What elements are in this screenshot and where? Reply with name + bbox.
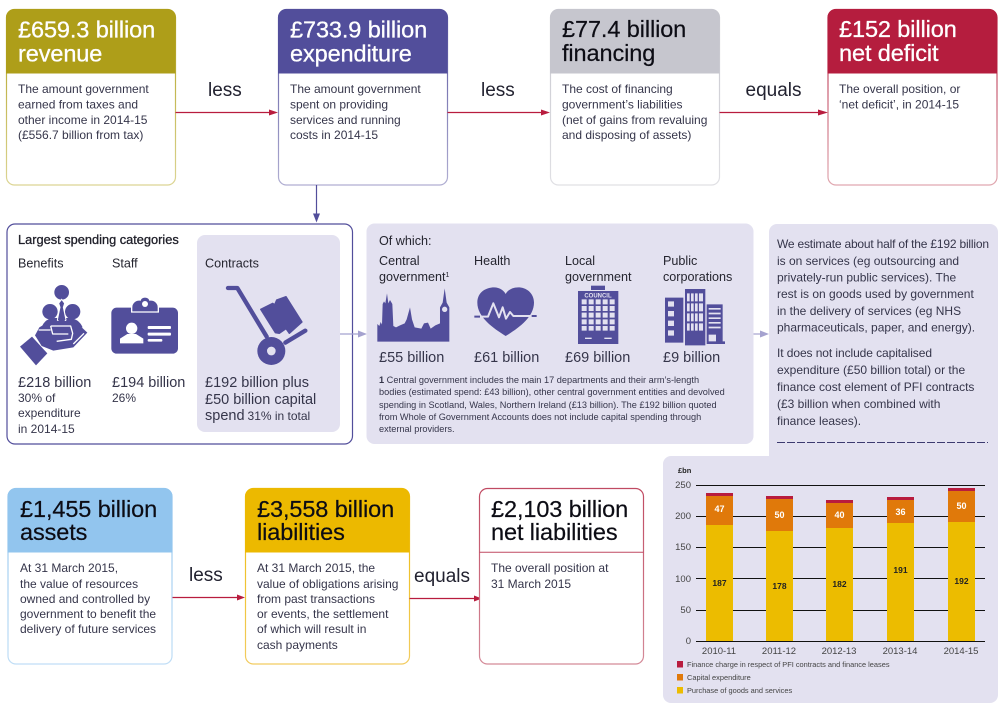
box: expenditure: spent on providing — [290, 98, 388, 112]
column: staff: Staff — [112, 256, 138, 270]
bar 2012-13: 2012-13 — [822, 646, 856, 657]
footnote: from Whole of Government Accounts does not include capital spending through — [379, 412, 701, 422]
column: public corporations: Public — [663, 254, 697, 268]
bar 2013-14: 191 — [893, 565, 908, 575]
box: net liabilities: 31 March 2015 — [491, 577, 571, 591]
text block: contracts explanation: We estimate about half of the £192 billion — [777, 237, 989, 251]
bar 2012-13: 40 — [834, 510, 845, 520]
box: revenue: other income in 2014-15 — [18, 113, 148, 127]
arrow: expenditure to spending categories — [313, 185, 320, 222]
callout: contracts: Contracts — [205, 256, 259, 270]
column: public corporations — [663, 254, 732, 366]
icon: council building: COUNCIL — [584, 294, 612, 300]
bar 2011-12: 2011-12 — [762, 646, 796, 657]
box: financing: £77.4 billion — [562, 16, 686, 42]
footnote: external providers. — [379, 424, 455, 434]
box: assets: £1,455 billion — [20, 496, 157, 522]
bar 2011-12: 178 — [772, 581, 787, 591]
callout: contracts: £50 billion capital — [205, 392, 316, 408]
box: assets: At 31 March 2015, — [20, 561, 118, 575]
box: revenue: earned from taxes and — [18, 98, 138, 112]
column: benefits: expenditure — [18, 406, 81, 420]
chart axis labels: 50 — [680, 605, 691, 616]
bar 2014-15 — [944, 488, 978, 657]
box: assets: government to benefit the — [20, 607, 156, 621]
label and arrow: less: less — [481, 80, 515, 101]
bar 2014-15: 2014-15 — [944, 646, 978, 657]
column: local government — [565, 254, 632, 366]
box: net deficit — [828, 10, 997, 185]
box: assets: assets — [20, 519, 87, 545]
text block: contracts explanation — [777, 237, 989, 428]
box: net liabilities: The overall position at — [491, 561, 609, 575]
box: revenue: The amount government — [18, 82, 149, 96]
box: net deficit: ‘net deficit’, in 2014-15 — [839, 98, 959, 112]
column: benefits: £218 billion — [18, 375, 91, 391]
chart axis labels: 100 — [675, 574, 691, 585]
box: financing: financing — [562, 40, 655, 66]
box: assets: the value of resources — [20, 577, 138, 591]
label and arrow: less: less — [208, 80, 242, 101]
chart legend: Purchase of goods and services — [687, 686, 792, 695]
column: central government: £55 billion — [379, 350, 444, 366]
footnote: bodies (estimated spend: £43 billion), other central government entities and devolved — [379, 387, 725, 397]
bar 2010-11: 47 — [714, 504, 725, 514]
icon: staff id badge — [111, 297, 178, 354]
box: financing: The cost of financing — [562, 82, 673, 96]
chart axis labels: 200 — [675, 511, 691, 522]
box: financing: and disposing of assets) — [562, 128, 691, 142]
column: benefits: 30% of — [18, 391, 56, 405]
chart axis labels: 0 — [686, 636, 691, 647]
column: staff: 26% — [112, 391, 136, 405]
box: liabilities: £3,558 billion — [257, 496, 394, 522]
icon: office buildings — [665, 289, 725, 345]
chart axis labels — [675, 480, 691, 647]
column: public corporations: £9 billion — [663, 350, 720, 366]
label and arrow: less — [176, 80, 278, 116]
arrow: categories to breakdown — [340, 330, 367, 338]
box: liabilities: of which will result in — [257, 622, 366, 636]
box: revenue: £659.3 billion — [18, 16, 155, 42]
box: liabilities — [245, 488, 410, 664]
column: central government — [377, 254, 450, 366]
column: health — [474, 254, 539, 366]
box: expenditure: services and running — [290, 113, 401, 127]
bar 2012-13 — [822, 500, 856, 657]
bar 2013-14: 2013-14 — [883, 646, 917, 657]
box: liabilities: At 31 March 2015, the — [257, 561, 375, 575]
text block: contracts explanation: pharmaceuticals, paper, and energy). — [777, 320, 975, 334]
column: benefits — [18, 256, 91, 436]
box: net liabilities — [480, 488, 644, 664]
column: central government: Central — [379, 254, 420, 268]
stacked bar chart: £bn — [678, 466, 692, 475]
column: benefits: Benefits — [18, 256, 64, 270]
column: staff — [111, 256, 185, 405]
box: expenditure: The amount government — [290, 82, 421, 96]
column: staff: £194 billion — [112, 375, 185, 391]
box: net liabilities: £2,103 billion — [491, 496, 628, 522]
panel: contracts explanation and chart background — [663, 224, 998, 703]
box: net deficit: £152 billion — [839, 16, 957, 42]
chart legend: Capital expenditure — [687, 673, 751, 682]
box: assets: delivery of future services — [20, 622, 156, 636]
bar 2014-15: 192 — [954, 576, 969, 586]
bar 2013-14: 36 — [895, 507, 906, 517]
text block: contracts explanation: It does not include capitalised — [777, 346, 932, 360]
box: liabilities: or events, the settlement — [257, 607, 389, 621]
panel heading: Largest spending categories — [18, 232, 179, 247]
text block: contracts explanation: rest is on goods used by government — [777, 287, 974, 301]
box: liabilities: from past transactions — [257, 592, 375, 606]
text block: contracts explanation: in the delivery of services (eg NHS — [777, 304, 961, 318]
bar 2010-11: 2010-11 — [702, 646, 736, 657]
column: local government: Local — [565, 254, 595, 268]
box: net deficit: net deficit — [839, 40, 939, 66]
box: revenue: (£556.7 billion from tax) — [18, 128, 143, 142]
box: assets — [8, 488, 172, 664]
column: local government: £69 billion — [565, 350, 630, 366]
callout: contracts — [197, 235, 340, 432]
label and arrow: equals: equals — [414, 566, 470, 587]
text block: contracts explanation: privately-run public services). The — [777, 270, 957, 284]
label and arrow: equals — [410, 566, 482, 602]
panel: of which breakdown: Of which: — [379, 234, 432, 248]
icon: heart with pulse — [474, 287, 537, 336]
bar 2014-15: 50 — [956, 501, 967, 511]
chart axis labels: 150 — [675, 542, 691, 553]
icon: hand holding people — [20, 285, 87, 365]
arrow: breakdown to contracts explanation — [754, 330, 769, 338]
footnote — [379, 375, 725, 434]
text block: contracts explanation: (£3 billion when combined with — [777, 397, 940, 411]
bar 2011-12 — [762, 496, 796, 657]
box: assets: owned and controlled by — [20, 592, 150, 606]
stacked bar chart — [675, 466, 985, 695]
bar 2010-11: 187 — [712, 578, 727, 588]
box: financing: government’s liabilities — [562, 98, 683, 112]
column: health: Health — [474, 254, 510, 268]
box: liabilities: cash payments — [257, 638, 338, 652]
column: central government: government — [379, 270, 446, 284]
box: net liabilities: net liabilities — [491, 519, 618, 545]
bar 2012-13: 182 — [832, 579, 847, 589]
text block: contracts explanation: expenditure (£50 billion total) or the — [777, 363, 965, 377]
callout: contracts: £192 billion plus — [205, 375, 309, 391]
box: expenditure — [278, 10, 448, 185]
footnote: 1 Central government includes the main 17 departments and their arm’s-length — [379, 375, 699, 385]
chart axis labels: 250 — [675, 480, 691, 491]
chart legend — [677, 660, 890, 695]
box: liabilities: value of obligations arising — [257, 577, 398, 591]
callout: contracts: spend31% in total — [205, 408, 310, 424]
column: local government: government — [565, 270, 632, 284]
column: public corporations: corporations — [663, 270, 732, 284]
label and arrow: equals: equals — [746, 80, 802, 101]
text block: contracts explanation: finance cost element of PFI contracts — [777, 380, 974, 394]
box: expenditure: costs in 2014-15 — [290, 128, 378, 142]
box: financing: (net of gains from revaluing — [562, 113, 707, 127]
footnote: spending in Scotland, Wales, Northern Ireland (£13 billion). The £192 billion quoted — [379, 400, 717, 410]
bar 2011-12: 50 — [774, 510, 785, 520]
panel: largest spending categories — [7, 224, 352, 444]
label and arrow: less — [172, 565, 245, 600]
box: revenue: revenue — [18, 40, 102, 66]
box: liabilities: liabilities — [257, 519, 345, 545]
panel: of which breakdown — [366, 224, 754, 444]
label and arrow: less: less — [189, 565, 223, 586]
box: expenditure: £733.9 billion — [290, 16, 427, 42]
text block: contracts explanation: finance leases). — [777, 414, 861, 428]
column: benefits: in 2014-15 — [18, 422, 75, 436]
icon: westminster skyline — [377, 288, 449, 342]
column: central government: 1 — [446, 272, 450, 279]
label and arrow: less — [448, 80, 550, 116]
bar 2010-11 — [702, 493, 736, 657]
chart legend: Finance charge in respect of PFI contracts and finance leases — [687, 660, 890, 669]
bar 2013-14 — [883, 497, 917, 657]
text block: contracts explanation: is on services (eg outsourcing and — [777, 254, 959, 268]
box: financing — [550, 10, 720, 185]
column: health: £61 billion — [474, 350, 539, 366]
box: expenditure: expenditure — [290, 40, 412, 66]
icon: hand trolley — [228, 288, 305, 365]
box: revenue — [6, 10, 176, 185]
label and arrow: equals — [720, 80, 828, 116]
box: net deficit: The overall position, or — [839, 82, 960, 96]
